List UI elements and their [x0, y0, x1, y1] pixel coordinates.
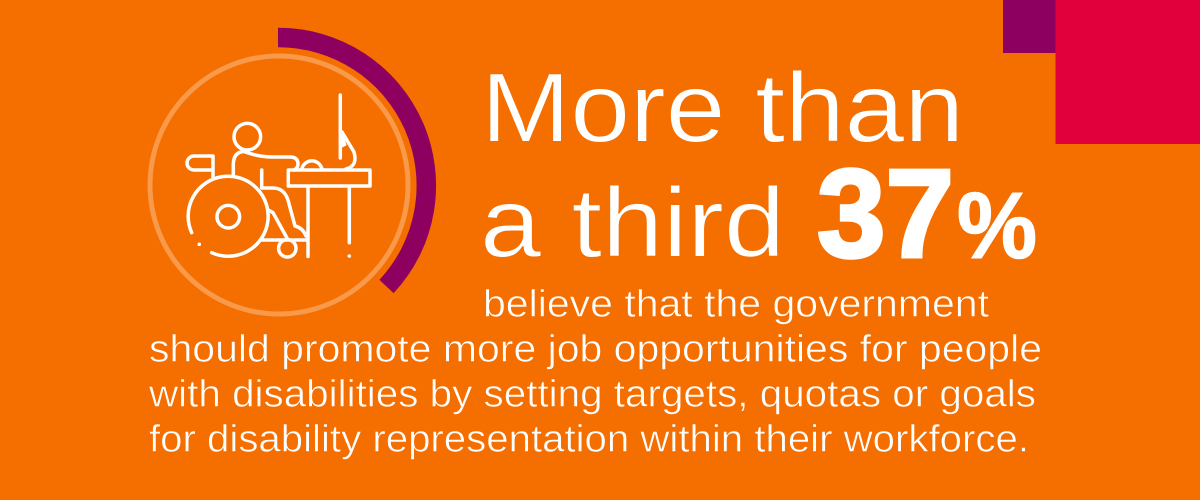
icon: desk [288, 170, 370, 256]
icon: monitor stand detail [342, 132, 346, 147]
body line 4: for disability representation within their workforce. [149, 419, 1029, 461]
ring around icon [150, 56, 408, 314]
icon: person in wheelchair at desk [187, 95, 370, 257]
icon: wheel hub [217, 205, 240, 228]
body text [148, 284, 1042, 461]
statistic 37% [817, 144, 1037, 284]
icon: body and arm [233, 152, 298, 175]
icon: mouse and hand [302, 161, 322, 169]
statistic percent sign: % [957, 173, 1037, 278]
icon: head [234, 123, 261, 150]
body line 3: with disabilities by setting targets, quotas or goals [148, 374, 1036, 416]
corner decoration: red square [1056, 0, 1200, 144]
heading line 2: a third [480, 168, 785, 278]
statistic number: 37 [817, 144, 954, 284]
icon: large wheel [188, 176, 268, 256]
icon: dot right [348, 255, 351, 257]
icon: dot left [198, 243, 201, 246]
body line 2: should promote more job opportunities for people [149, 329, 1042, 371]
heading [480, 53, 964, 278]
icon: wheelchair handle [187, 156, 213, 177]
corner decoration: purple square [1003, 0, 1056, 53]
icon: monitor [340, 95, 355, 169]
body line 1: believe that the government [483, 284, 989, 326]
icon: small wheel [279, 240, 296, 257]
heading line 1: More than [481, 53, 964, 163]
icon: legs and chair seat [262, 170, 307, 240]
progress arc 37% [278, 37, 426, 287]
